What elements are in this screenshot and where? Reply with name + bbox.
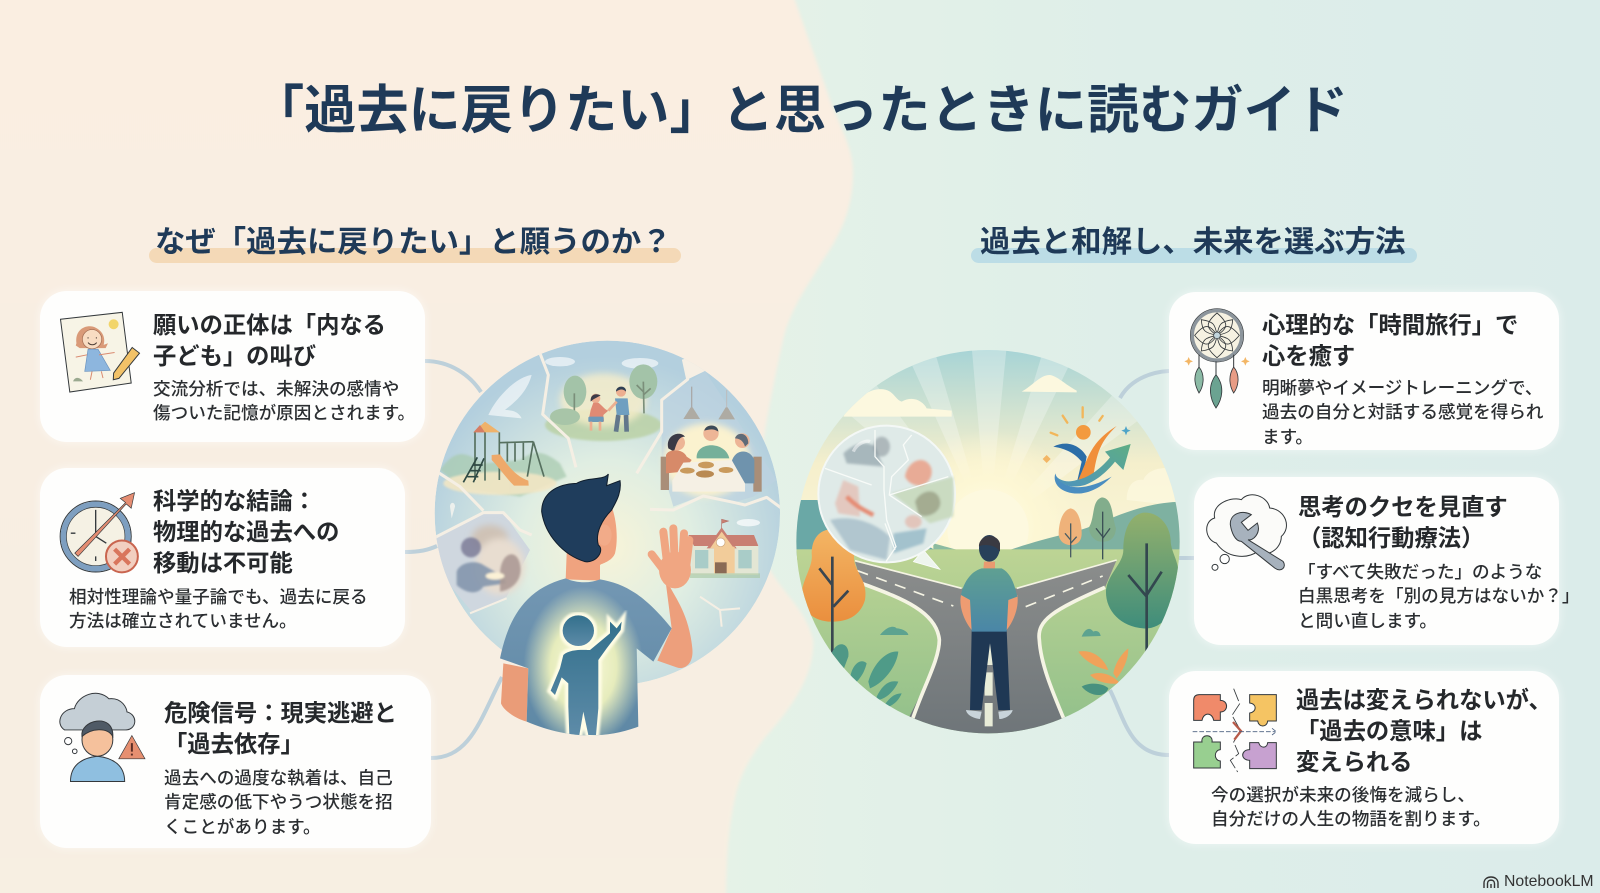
scene: sky swoosh and clouds: [488, 357, 658, 418]
scene: blurred grieving figures: [433, 513, 530, 613]
forked road: [855, 560, 1117, 743]
heading: 思考のクセを見直す: [1298, 494, 1508, 520]
heading: 科学的な結論：: [153, 488, 316, 514]
body text: 相対性理論や量子論でも、過去に戻る: [69, 587, 368, 607]
left arm: [501, 663, 528, 722]
body text: 交流分析では、未解決の感情や: [153, 379, 399, 399]
heading: 物理的な過去への: [153, 519, 339, 545]
cracks: [433, 353, 782, 627]
heading: [153, 488, 339, 576]
icon: person under cloud with warning: [59, 692, 146, 782]
body text: くことがあります。: [164, 817, 321, 837]
icon: child's drawing and pencil: [60, 312, 140, 393]
shattered memory circle: [433, 341, 782, 686]
scene: two children holding hands: [545, 364, 662, 441]
sky: [801, 350, 1175, 537]
heading: [1296, 687, 1552, 775]
heading: 移動は不可能: [153, 550, 293, 576]
illustration: person at crossroads: [796, 350, 1180, 734]
body text: [1262, 378, 1544, 447]
icon: thought cloud and wrench: [1206, 494, 1287, 571]
body text: [1211, 785, 1491, 829]
body text: 白黒思考を「別の見方はないか？」: [1298, 586, 1580, 606]
logo: growth swoosh with sun: [1043, 407, 1131, 494]
notch between shards: [684, 359, 704, 379]
neck and ear: [566, 507, 617, 581]
ground: [793, 549, 1187, 739]
hair: [542, 474, 620, 562]
heading: 変えられる: [1296, 749, 1412, 775]
heading: 「過去の意味」は: [1296, 718, 1482, 744]
heading: [164, 700, 397, 757]
body text: 今の選択が未来の後悔を減らし、: [1211, 785, 1475, 805]
title: 「過去に戻りたい」と思ったときに読むガイド: [252, 82, 1348, 140]
illustration: man looking back at shattered memories: [434, 340, 780, 736]
body text: 自分だけの人生の物語を割ります。: [1211, 809, 1491, 829]
waving arm and hand: [652, 528, 693, 668]
heading: 危険信号：現実逃避と: [164, 700, 397, 726]
small trees: [1059, 497, 1116, 559]
panel: inner child: [40, 291, 425, 442]
body text: 明晰夢やイメージトレーニングで、: [1262, 378, 1542, 398]
heading: 過去は変えられないが、: [1296, 687, 1552, 713]
body text: と問い直します。: [1298, 611, 1437, 631]
icon: dreamcatcher: [1184, 308, 1250, 409]
body text: ます。: [1262, 427, 1313, 447]
man seen from behind: [500, 474, 693, 748]
heading: 心理的な「時間旅行」で: [1262, 312, 1518, 338]
body text: [1298, 562, 1580, 631]
body text: [69, 587, 368, 631]
sun rays: [852, 350, 1137, 484]
body text: 傷ついた記憶が原因とされます。: [153, 403, 415, 423]
heading: [1298, 494, 1508, 551]
heading: [153, 312, 386, 369]
heading: 「過去依存」: [164, 731, 304, 757]
heading: （認知行動療法）: [1298, 525, 1484, 551]
person standing at the fork: [960, 535, 1018, 719]
heading: [1262, 312, 1518, 369]
panel: danger signal: [40, 675, 431, 848]
scene: upper-left small shard: [450, 503, 455, 518]
body text: 過去の自分と対話する感覚を得られ: [1262, 402, 1544, 422]
heading: 心を癒す: [1262, 343, 1355, 369]
panel: science verdict: [40, 468, 405, 647]
body text: 肯定感の低下やうつ状態を招: [164, 792, 393, 812]
icon: clock with crossed arrow: [60, 492, 139, 574]
memory bubble: [818, 426, 955, 569]
panel: cognitive behavioral therapy: [1194, 477, 1559, 645]
plants: [832, 627, 1128, 708]
clouds: [843, 375, 1187, 507]
t-shirt: [500, 578, 672, 735]
body text: 「すべて失敗だった」のような: [1298, 562, 1542, 582]
inner child silhouette with glow: [525, 590, 640, 736]
panel: reframing the meaning: [1169, 671, 1559, 844]
scene: playground: [440, 422, 567, 497]
heading: left section: なぜ「過去に戻りたい」と願うのか？: [155, 225, 672, 259]
hills: [793, 500, 940, 560]
scene: family dinner: [660, 386, 762, 506]
panel: psychological time travel: [1169, 292, 1559, 450]
heading: right section: 過去と和解し、未来を選ぶ方法: [980, 225, 1405, 259]
scene: school building: [688, 519, 760, 578]
body text: 過去への過度な執着は、自己: [164, 768, 393, 788]
icon: puzzle pieces: [1192, 688, 1277, 772]
logo: NotebookLM: NotebookLM: [1504, 873, 1594, 890]
body text: [164, 768, 393, 837]
orange tree: [802, 529, 866, 657]
heading: 子ども」の叫び: [153, 343, 316, 369]
green tree: [1106, 513, 1179, 657]
heading: 願いの正体は「内なる: [153, 312, 386, 338]
body text: [153, 379, 415, 423]
body text: 方法は確立されていません。: [69, 611, 297, 631]
